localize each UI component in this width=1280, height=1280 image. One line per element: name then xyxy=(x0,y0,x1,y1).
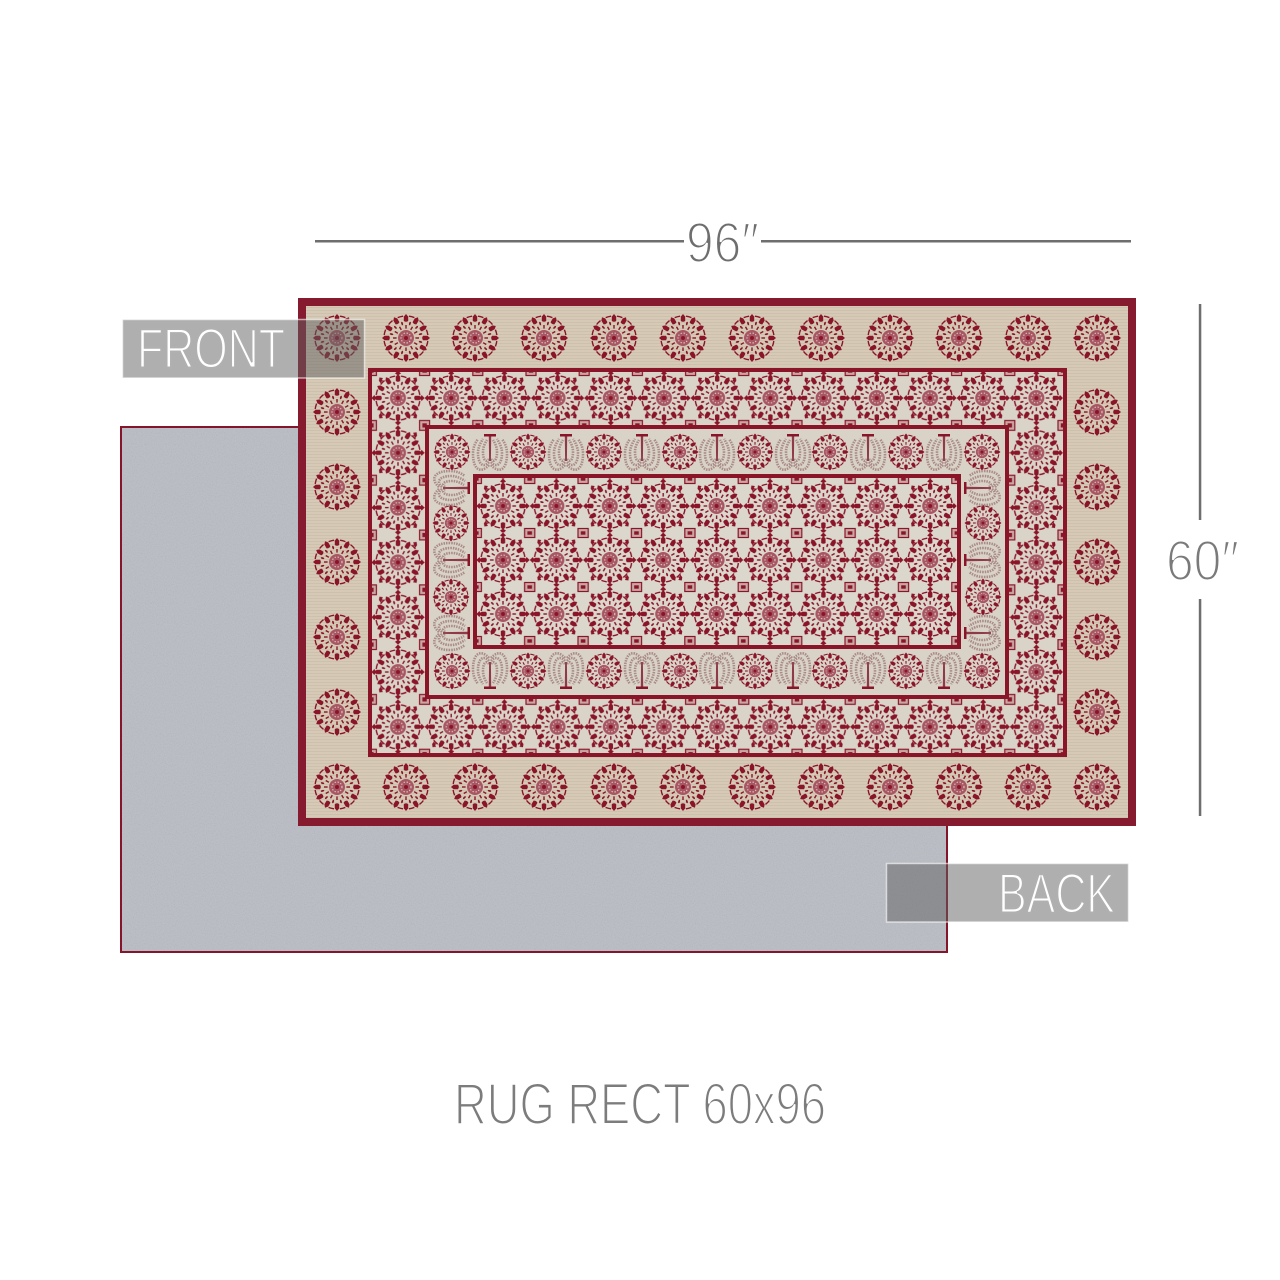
inner band medallions xyxy=(432,433,1002,690)
outer ring of medallions xyxy=(312,313,1122,812)
inner cream band xyxy=(427,427,1007,697)
label: BACK: BACK xyxy=(998,862,1115,924)
title: product caption: RUG RECT 60x96 xyxy=(454,1072,826,1137)
rug outer red binding xyxy=(298,298,1136,826)
outer cream border xyxy=(306,306,1128,818)
dimension: height 60 inches: 60″ xyxy=(1166,529,1239,593)
inner band willow trees xyxy=(434,434,1000,689)
back of rug xyxy=(121,427,947,952)
front of rug xyxy=(298,298,1136,826)
central patterned field xyxy=(475,476,959,647)
label: FRONT: FRONT xyxy=(137,316,285,380)
dimension: width 96 inches: 96″ xyxy=(686,211,759,275)
patterned lattice band xyxy=(370,370,1065,755)
label: BACK xyxy=(886,862,1128,924)
